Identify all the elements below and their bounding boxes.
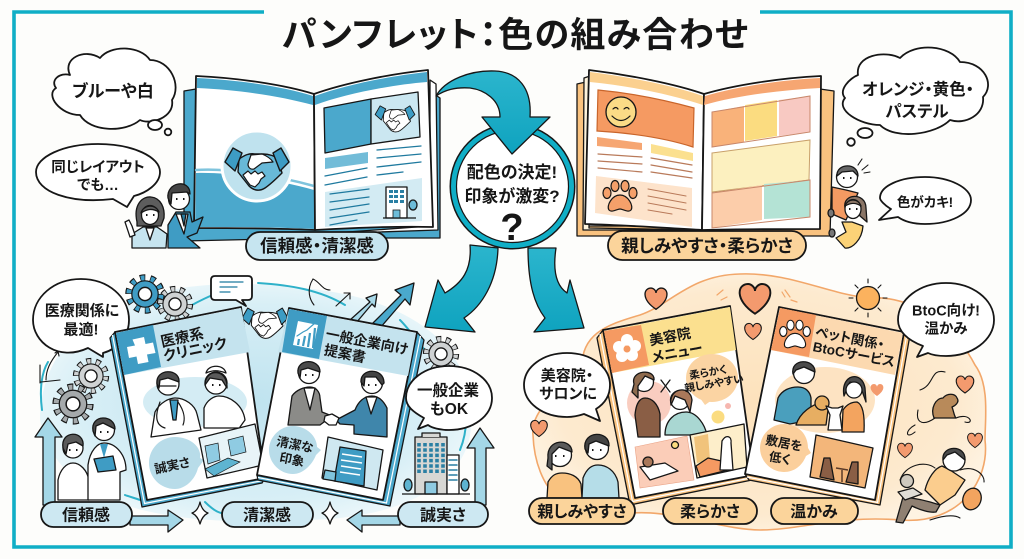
colour swatches xyxy=(712,96,810,228)
brochure: pet services xyxy=(745,307,910,505)
bottom info panel xyxy=(325,178,422,227)
bubble: beauty salon: サロンに xyxy=(539,386,597,402)
bubble: general companies xyxy=(406,366,492,430)
bubble: beauty salon xyxy=(524,353,610,421)
pill: friendly and soft xyxy=(608,231,806,260)
central circle: 印象が激変? xyxy=(464,186,560,206)
arrow left to cleanliness xyxy=(347,510,400,532)
sparkle left xyxy=(192,502,208,524)
right page xyxy=(314,70,433,230)
back cover xyxy=(184,89,440,241)
panel: blue examples xyxy=(33,276,494,532)
pill: trust xyxy=(41,502,132,527)
handshake illustration xyxy=(288,362,387,437)
lounge image xyxy=(690,424,747,478)
clean impression badge: 清潔な xyxy=(275,434,315,455)
central circle: ? xyxy=(500,207,524,249)
sincerity badge: 誠実さ xyxy=(153,454,191,477)
header text: 美容院 xyxy=(648,325,692,348)
clean impression badge: 印象 xyxy=(278,450,306,469)
brochure: clinic xyxy=(110,307,265,507)
room image xyxy=(199,424,263,478)
bubble: general companies: 一般企業 xyxy=(417,380,479,400)
icon block xyxy=(771,308,816,357)
pill: friendly and soft: 親しみやすさ・柔らかさ xyxy=(621,236,793,256)
arrow right to cleanliness xyxy=(130,510,183,532)
pill: soft xyxy=(663,498,757,524)
threshold badge: 低く xyxy=(768,449,792,467)
relaxing man and cat xyxy=(896,448,984,523)
brochure: business proposal xyxy=(257,308,424,506)
hairdresser illustration xyxy=(627,372,707,437)
panel: warm examples xyxy=(524,274,994,530)
bubble: orange yellow pastel xyxy=(843,47,988,146)
soft badge: 親しみやすい xyxy=(684,372,745,395)
brochure: beauty salon xyxy=(597,306,754,505)
header text: 提案書 xyxy=(323,342,367,365)
small handshake xyxy=(242,308,288,338)
chat icon xyxy=(211,276,252,306)
tall building xyxy=(402,433,470,494)
sparkle ticks xyxy=(717,290,797,302)
left page xyxy=(194,76,315,230)
pill: trust and cleanliness: 信頼感・清潔感 xyxy=(260,236,374,256)
header xyxy=(278,309,416,376)
header text xyxy=(159,325,229,365)
bubble: BtoC xyxy=(898,283,994,357)
bubble: BtoC: 温かみ xyxy=(924,320,968,338)
arrow: from blue book xyxy=(436,71,550,154)
bubble: beauty salon: 美容院・ xyxy=(541,366,593,384)
bubble: same layout: 同じレイアウト xyxy=(51,159,145,176)
text lines xyxy=(325,146,421,185)
icon block xyxy=(282,309,327,359)
sincerity badge xyxy=(149,437,204,489)
sparkle right xyxy=(322,502,338,524)
pill: warm: 温かみ xyxy=(790,503,838,521)
header text: 医療系 xyxy=(159,325,206,351)
up arrow right xyxy=(467,428,494,505)
pill: sincerity xyxy=(398,502,488,527)
pill: cleanliness: 清潔感 xyxy=(243,506,291,524)
arrow: to blue examples xyxy=(425,245,498,332)
header text: 一般企業向け xyxy=(324,326,409,357)
bubble: orange yellow pastel: パステル xyxy=(885,102,949,121)
gears xyxy=(57,278,455,420)
up arrow left xyxy=(35,418,62,505)
icon block xyxy=(604,325,649,373)
central circle: 配色の決定! xyxy=(467,162,557,182)
back pages xyxy=(257,332,424,506)
pill: trust and cleanliness xyxy=(246,232,388,260)
pill: warm xyxy=(771,498,858,524)
bubble: orange yellow pastel: オレンジ・黄色・ xyxy=(862,79,974,99)
bubble: BtoC: BtoC向け! xyxy=(912,302,980,320)
left page text lines xyxy=(597,137,693,178)
bubble: color is key: 色がカキ! xyxy=(897,194,953,210)
pill: sincerity: 誠実さ xyxy=(420,506,466,524)
panel: warm pamphlet concept xyxy=(577,47,988,260)
header text xyxy=(648,325,704,365)
dog doodle xyxy=(908,371,970,435)
bubble: same layout: でも… xyxy=(77,177,119,194)
peach backdrop xyxy=(533,274,986,530)
paw panel xyxy=(595,176,692,227)
sun xyxy=(849,279,887,317)
peeking couple xyxy=(828,159,870,248)
threshold badge: 敷居を xyxy=(764,432,804,454)
header xyxy=(771,308,903,375)
bubble: medical: 医療関係に xyxy=(45,302,119,320)
page xyxy=(257,308,417,500)
family illustration xyxy=(774,362,883,433)
arrow: to warm examples xyxy=(528,248,584,332)
back pages xyxy=(110,332,265,507)
bubble: color is key xyxy=(879,177,971,224)
dashed ring xyxy=(41,283,466,514)
clean impression badge xyxy=(269,426,321,474)
soft badge: 柔らかく xyxy=(688,363,728,382)
cross icon xyxy=(127,337,156,364)
pill: friendly: 親しみやすさ xyxy=(537,503,627,521)
bubble: blue and white: ブルーや白 xyxy=(72,81,154,101)
header text: BtoCサービス xyxy=(812,338,896,370)
bubble: same layout xyxy=(36,144,160,207)
pill: trust: 信頼感 xyxy=(62,506,110,524)
threshold badge xyxy=(760,424,811,472)
building image xyxy=(322,437,383,490)
orange open book xyxy=(577,70,834,236)
left page xyxy=(585,70,704,230)
cafe image xyxy=(810,435,873,488)
hearts xyxy=(531,284,982,458)
pale blue backdrop xyxy=(40,284,471,521)
title: パンフレット：色の組み合わせ xyxy=(282,16,748,55)
smiling couple xyxy=(547,434,619,498)
pill: cleanliness xyxy=(222,502,313,527)
top panel with smiley xyxy=(597,90,694,147)
central circle xyxy=(450,124,576,250)
flower icon xyxy=(613,334,641,362)
chart icon xyxy=(293,321,318,349)
bubble: blue and white xyxy=(52,48,176,135)
header xyxy=(116,308,250,375)
bubble: medical: 最適! xyxy=(64,320,98,338)
pointing couple xyxy=(125,184,203,248)
staff illustration xyxy=(143,366,247,437)
top image panel xyxy=(324,92,420,153)
bubble: general companies: もOK xyxy=(430,400,469,418)
nurse and doctor xyxy=(58,418,126,500)
panel: blue pamphlet concept xyxy=(36,48,440,260)
spa image xyxy=(635,436,694,488)
header text xyxy=(812,324,896,370)
soft badge xyxy=(684,354,745,424)
handshake medallion xyxy=(222,131,292,201)
right page xyxy=(702,76,821,230)
header text: メニュー xyxy=(650,340,704,365)
header xyxy=(604,307,736,373)
growth arrows xyxy=(40,279,414,383)
header text: ペット関係・ xyxy=(814,324,886,353)
pill: friendly xyxy=(529,498,635,524)
blue open book xyxy=(184,70,440,241)
header text: クリニック xyxy=(162,335,229,365)
pill: soft: 柔らかさ xyxy=(680,503,740,521)
icon block xyxy=(116,325,161,375)
paw icon xyxy=(780,320,810,348)
page xyxy=(115,307,265,500)
bubble: medical xyxy=(33,279,129,357)
